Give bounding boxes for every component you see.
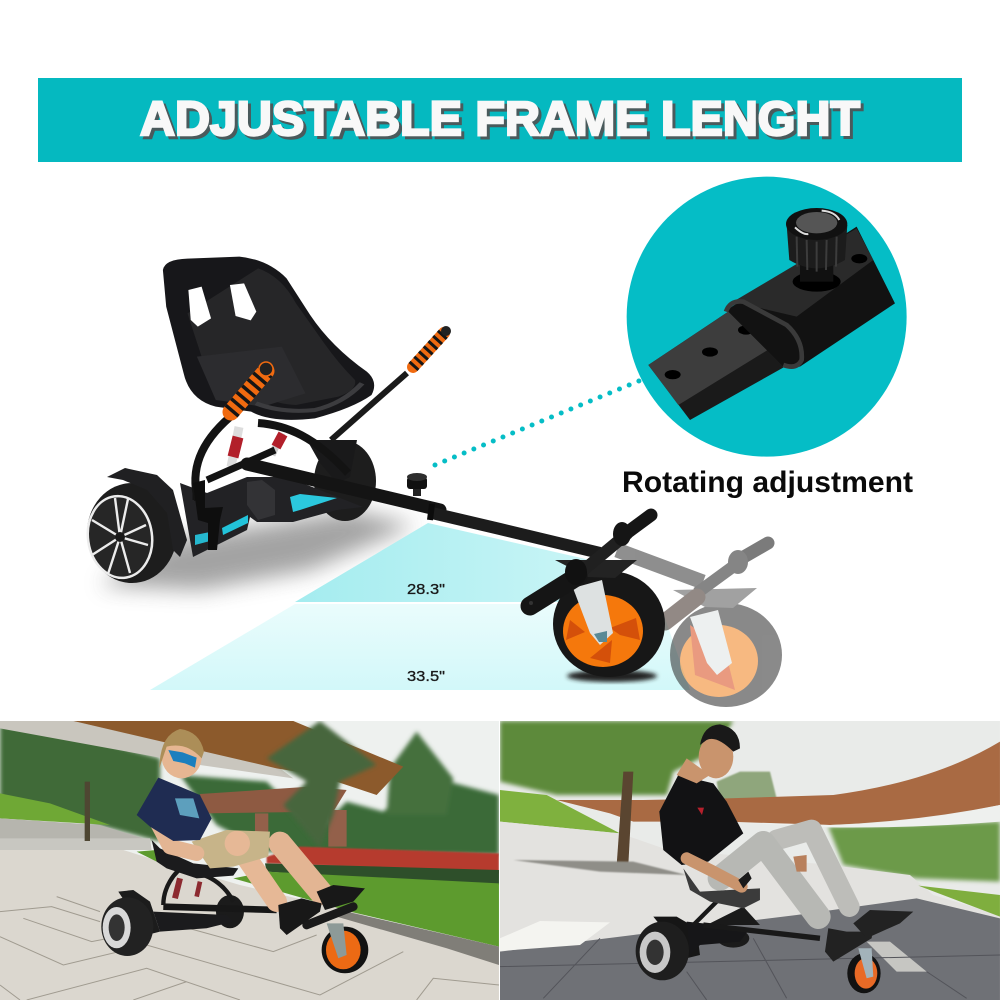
tree trunk (85, 782, 90, 841)
kart (636, 868, 881, 993)
roof wood (73, 721, 403, 795)
grass right (918, 886, 1000, 917)
dimension label 28.3: 28.3" (407, 581, 445, 598)
side led (222, 515, 248, 535)
grass (233, 872, 499, 947)
shock absorbers (231, 427, 283, 467)
far leg (280, 843, 322, 893)
seat and upper frame drawn from zoom coordinates (163, 257, 374, 420)
tree trunk (617, 772, 633, 865)
zoom circle: rotating adjustment detail (627, 177, 907, 457)
hand remote (738, 872, 752, 888)
steering bar (331, 373, 407, 440)
seat hole right (230, 283, 256, 320)
product diagram: kart with frame length extension (83, 257, 782, 707)
shorts (192, 830, 270, 868)
background trees (0, 725, 499, 855)
fender (107, 468, 187, 557)
background trees right (828, 822, 1000, 882)
far leg (777, 830, 849, 907)
shoes (278, 898, 322, 935)
hoverboard body (180, 477, 363, 557)
seat hole left (188, 287, 211, 327)
hedge (265, 863, 499, 885)
hill (500, 790, 620, 833)
dark shade on steps (513, 860, 687, 875)
shoes (825, 928, 873, 962)
forearm (687, 858, 742, 887)
ground (500, 822, 1000, 952)
head (699, 735, 733, 778)
grip bottom (530, 576, 578, 606)
bracket plate (555, 560, 637, 578)
seat (163, 257, 374, 420)
band underside (786, 805, 1000, 828)
near leg (237, 843, 277, 902)
seat base panel (197, 347, 305, 407)
grip top (628, 515, 651, 532)
inner tube (648, 312, 787, 420)
left hill (0, 793, 110, 825)
strap (193, 480, 223, 550)
title shadow: ADJUSTABLE FRAME LENGHT (143, 96, 863, 149)
foam handle right (413, 326, 451, 367)
flower bed (267, 847, 499, 873)
ghost bracket (690, 610, 732, 675)
seat inner (187, 268, 355, 405)
pavement (0, 850, 499, 1000)
frame arches and lower bars (195, 417, 348, 500)
inner frame tube (432, 513, 600, 553)
ground shadow (100, 510, 415, 590)
caption: rotating adjustment: Rotating adjustment (622, 466, 913, 499)
curved wooden band (557, 742, 1000, 825)
led light bar (290, 494, 337, 512)
model badge (195, 532, 210, 545)
foam handle left (231, 362, 273, 412)
central fir tree (267, 721, 377, 848)
measure zone 33.5 inch (150, 604, 690, 690)
sunglasses (168, 750, 197, 768)
arm (155, 818, 197, 853)
near leg (720, 843, 818, 917)
heart emblem (697, 808, 704, 815)
rear bracket (307, 440, 357, 483)
knee (225, 831, 250, 856)
seat (683, 868, 760, 908)
photo: boy riding kart (0, 721, 499, 1000)
paving lines (500, 938, 1000, 1000)
shirt (137, 778, 212, 841)
wheel bracket (573, 580, 613, 645)
outer sleeve (726, 227, 895, 367)
light patch (500, 921, 610, 951)
rear tyre (314, 441, 376, 521)
shirt (659, 775, 743, 865)
paving lines (0, 897, 499, 1000)
measure zone 28.3 inch (295, 523, 590, 602)
head (162, 746, 202, 778)
dimension label 33.5: 33.5" (407, 668, 445, 685)
roof white fascia (0, 721, 293, 778)
front wheel shadow (567, 670, 657, 682)
height knob (407, 473, 427, 496)
dark paving (500, 898, 1000, 1000)
kart (101, 840, 368, 973)
tree canopy (500, 721, 733, 795)
photo: young man riding kart (500, 721, 1000, 1000)
lower roof (200, 787, 347, 813)
dotted connector line (435, 381, 639, 465)
kerb (337, 912, 499, 965)
sleeve collar (430, 504, 432, 520)
neck (677, 758, 710, 783)
seat (152, 840, 238, 878)
man (659, 724, 913, 962)
ghost extended position (617, 543, 782, 707)
hoverboard front wheel (83, 483, 177, 583)
seat rim (256, 383, 362, 411)
steps (0, 818, 143, 840)
boy (137, 729, 365, 935)
title banner (38, 78, 962, 162)
title: ADJUSTABLE FRAME LENGHT (140, 93, 860, 146)
front wheel and handlebar (529, 515, 665, 677)
crossbar (580, 533, 628, 573)
knob detail (786, 208, 847, 292)
main frame tube (247, 464, 440, 510)
